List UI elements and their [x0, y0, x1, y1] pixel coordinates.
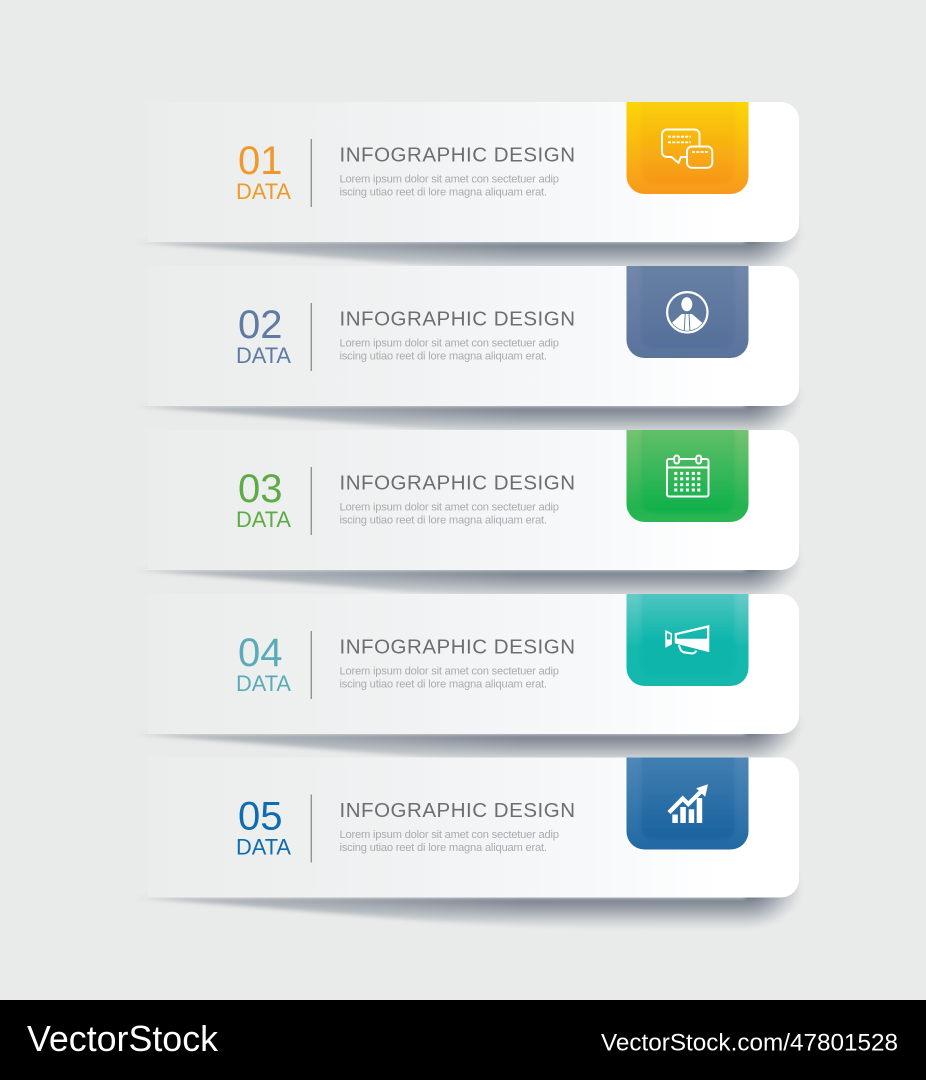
card — [135, 594, 799, 734]
body text: Lorem ipsum dolor sit amet con sectetuer adip — [340, 174, 559, 186]
body text: Lorem ipsum dolor sit amet con sectetuer adip — [340, 502, 559, 514]
card shadow — [147, 720, 800, 758]
data label: DATA — [236, 671, 291, 696]
heading: INFOGRAPHIC DESIGN — [340, 799, 575, 822]
divider — [311, 794, 312, 862]
tab — [626, 256, 748, 358]
card shadow — [147, 884, 800, 927]
divider — [311, 303, 312, 371]
panel: row 05 — [135, 748, 803, 930]
icon: megaphone — [665, 625, 709, 654]
number: 02 — [238, 303, 282, 347]
body text: Lorem ipsum dolor sit amet con sectetuer adip — [340, 829, 559, 841]
panel: row 02 — [147, 266, 800, 430]
body text — [340, 829, 559, 854]
number: 03 — [238, 467, 282, 511]
body text: iscing utiao reet di lore magna aliquam erat. — [340, 350, 547, 362]
body text: iscing utiao reet di lore magna aliquam erat. — [340, 186, 547, 198]
footer bar — [0, 1000, 926, 1080]
card — [135, 430, 799, 570]
footer url: VectorStock.com/47801528 — [601, 1030, 898, 1056]
card shadow — [147, 556, 800, 594]
tab — [626, 748, 748, 850]
body text: Lorem ipsum dolor sit amet con sectetuer adip — [340, 666, 559, 678]
heading: INFOGRAPHIC DESIGN — [340, 472, 575, 495]
body text — [340, 338, 559, 362]
heading: INFOGRAPHIC DESIGN — [340, 636, 575, 659]
body text: iscing utiao reet di lore magna aliquam erat. — [340, 514, 547, 526]
body text: Lorem ipsum dolor sit amet con sectetuer adip — [340, 338, 559, 350]
divider — [311, 139, 312, 207]
card shadow — [147, 392, 800, 430]
number: 01 — [238, 139, 282, 183]
body text — [340, 174, 559, 198]
number: 04 — [238, 631, 282, 675]
icon: speech bubbles — [662, 130, 712, 168]
divider — [311, 631, 312, 699]
icon: growth chart — [669, 784, 708, 823]
icon: calendar — [667, 456, 708, 496]
card — [135, 266, 799, 406]
card — [135, 102, 799, 242]
body text — [340, 666, 559, 690]
panel: row 04 — [147, 594, 800, 758]
data label: DATA — [236, 834, 291, 859]
heading: INFOGRAPHIC DESIGN — [340, 308, 575, 331]
divider — [311, 467, 312, 535]
tab — [626, 584, 748, 686]
card shadow — [147, 228, 800, 266]
body text — [340, 502, 559, 526]
card — [135, 758, 799, 898]
body text: iscing utiao reet di lore magna aliquam erat. — [340, 842, 547, 854]
tab — [626, 420, 748, 522]
panel: row 01 — [147, 102, 800, 266]
data label: DATA — [236, 507, 291, 532]
tab — [626, 92, 748, 194]
body text: iscing utiao reet di lore magna aliquam erat. — [340, 678, 547, 690]
heading: INFOGRAPHIC DESIGN — [340, 144, 575, 167]
data label: DATA — [236, 343, 291, 368]
icon: businessman — [667, 292, 708, 336]
footer brand: VectorStock — [27, 1018, 219, 1059]
panel: row 03 — [147, 430, 800, 594]
data label: DATA — [236, 179, 291, 204]
number: 05 — [238, 794, 282, 838]
